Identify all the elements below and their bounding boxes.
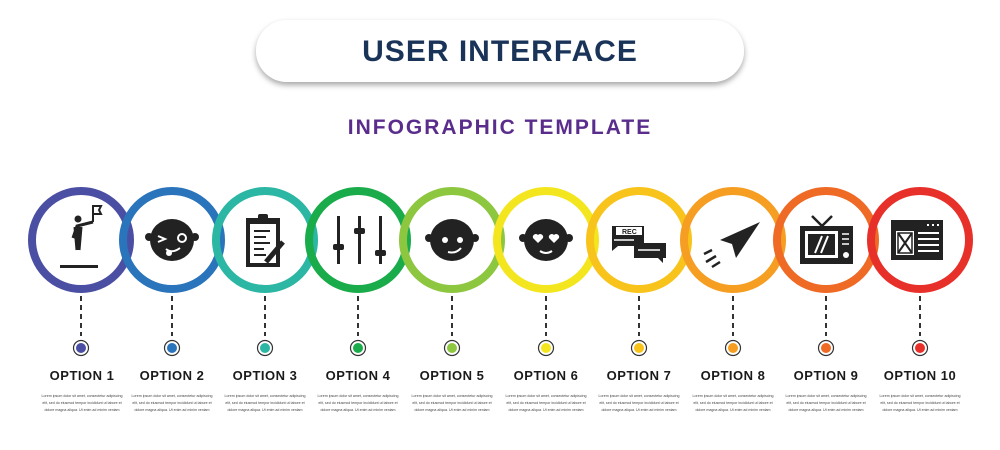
description texts: dolore magna aliqua. Ut enim ad minim veniam [788,408,864,412]
connectors [81,296,920,336]
description texts: dolore magna aliqua. Ut enim ad minim veniam [414,408,490,412]
description texts [42,394,960,412]
description texts: elit, sed do eiusmod tempor incididunt ut labore et [599,401,679,405]
description texts: elit, sed do eiusmod tempor incididunt ut labore et [693,401,773,405]
option labels: OPTION 5 [420,368,484,383]
circles row [32,191,969,289]
description texts: Lorem ipsum dolor sit amet, consectetur adipiscing [318,394,398,398]
description texts: Lorem ipsum dolor sit amet, consectetur adipiscing [880,394,960,398]
description texts: dolore magna aliqua. Ut enim ad minim veniam [882,408,958,412]
description texts: dolore magna aliqua. Ut enim ad minim veniam [695,408,771,412]
icon: chat REC: REC [622,229,637,236]
title pill [256,20,744,82]
description texts: Lorem ipsum dolor sit amet, consectetur adipiscing [786,394,866,398]
description texts: elit, sed do eiusmod tempor incididunt ut labore et [42,401,122,405]
icon: smirk face [425,219,479,261]
icon: person with flag [60,206,101,268]
icon: retro tv [800,216,853,264]
icon: heart eyes face [519,219,573,261]
icon: chat REC [612,226,666,263]
option labels: OPTION 2 [140,368,204,383]
description texts: Lorem ipsum dolor sit amet, consectetur adipiscing [506,394,586,398]
option labels: OPTION 9 [794,368,858,383]
description texts: dolore magna aliqua. Ut enim ad minim veniam [134,408,210,412]
description texts: elit, sed do eiusmod tempor incididunt ut labore et [506,401,586,405]
description texts: dolore magna aliqua. Ut enim ad minim veniam [44,408,120,412]
description texts: Lorem ipsum dolor sit amet, consectetur adipiscing [412,394,492,398]
option labels: OPTION 6 [514,368,578,383]
description texts: elit, sed do eiusmod tempor incididunt ut labore et [132,401,212,405]
description texts: Lorem ipsum dolor sit amet, consectetur adipiscing [225,394,305,398]
markers [74,340,928,356]
icon: browser layout [891,220,943,260]
description texts: elit, sed do eiusmod tempor incididunt ut labore et [880,401,960,405]
description texts: Lorem ipsum dolor sit amet, consectetur adipiscing [132,394,212,398]
option labels: OPTION 8 [701,368,765,383]
title: USER INTERFACE [362,35,638,68]
description texts: Lorem ipsum dolor sit amet, consectetur adipiscing [599,394,679,398]
subtitle: INFOGRAPHIC TEMPLATE [348,116,652,139]
icon: paper plane [704,222,760,267]
description texts: elit, sed do eiusmod tempor incididunt ut labore et [225,401,305,405]
description texts: dolore magna aliqua. Ut enim ad minim veniam [508,408,584,412]
description texts: Lorem ipsum dolor sit amet, consectetur adipiscing [42,394,122,398]
icon: clipboard [246,214,283,267]
description texts: dolore magna aliqua. Ut enim ad minim veniam [601,408,677,412]
option labels: OPTION 10 [884,368,956,383]
description texts: Lorem ipsum dolor sit amet, consectetur adipiscing [693,394,773,398]
description texts: elit, sed do eiusmod tempor incididunt ut labore et [412,401,492,405]
description texts: dolore magna aliqua. Ut enim ad minim veniam [227,408,303,412]
description texts: elit, sed do eiusmod tempor incididunt ut labore et [318,401,398,405]
option labels: OPTION 1 [50,368,114,383]
icon: winking face [145,219,199,261]
option labels: OPTION 4 [326,368,391,383]
option labels: OPTION 7 [607,368,671,383]
option labels [50,368,956,383]
option labels: OPTION 3 [233,368,297,383]
icon: sliders [333,216,386,264]
description texts: dolore magna aliqua. Ut enim ad minim veniam [320,408,396,412]
description texts: elit, sed do eiusmod tempor incididunt ut labore et [786,401,866,405]
